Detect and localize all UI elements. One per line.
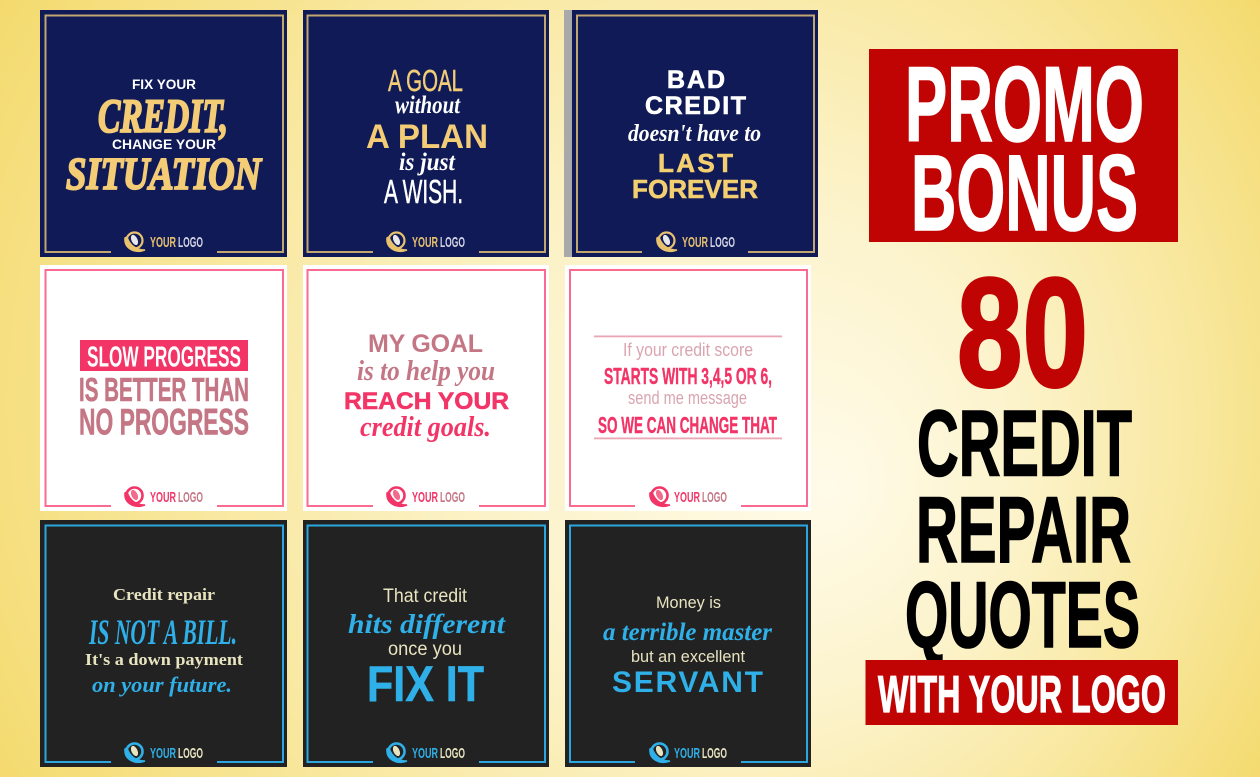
quote text: if your credit score bbox=[594, 336, 782, 439]
quote text: a goal without a plan: A PLAN bbox=[366, 118, 488, 156]
logo: LOGO bbox=[440, 489, 465, 506]
quote text: slow progress: IS BETTER THAN bbox=[79, 371, 249, 408]
logo: YOUR bbox=[412, 234, 438, 251]
logo: YOUR bbox=[150, 745, 176, 762]
panel: a goal without a plan bbox=[303, 10, 549, 257]
logo: LOGO bbox=[178, 234, 203, 251]
quote text: fix it: hits different bbox=[348, 609, 507, 639]
quote text: money is: but an excellent bbox=[631, 647, 745, 666]
panel: if your credit score bbox=[565, 265, 811, 511]
quote text: slow progress: NO PROGRESS bbox=[79, 402, 249, 442]
quote text: a goal without a plan: A WISH. bbox=[384, 173, 463, 210]
logo: LOGO bbox=[710, 234, 735, 251]
quote text: is not a bill: IS NOT A BILL. bbox=[88, 612, 237, 652]
number: 80: 80 bbox=[957, 246, 1088, 419]
logo bbox=[125, 488, 203, 506]
quote text: bad credit bbox=[628, 66, 761, 204]
quote text: if your credit score: STARTS WITH 3,4,5 OR 6, bbox=[604, 363, 772, 389]
logo bbox=[387, 744, 465, 762]
quote text: if your credit score: send me message bbox=[628, 388, 747, 408]
logo: LOGO bbox=[178, 745, 203, 762]
quote text: is not a bill bbox=[85, 585, 243, 697]
logo bbox=[657, 232, 735, 251]
quote text: money is: a terrible master bbox=[603, 619, 772, 646]
quote text: fix your credit: CHANGE YOUR bbox=[112, 137, 216, 152]
quote text: if your credit score: SO WE CAN CHANGE THAT bbox=[598, 412, 777, 438]
quote text: fix your credit bbox=[66, 77, 262, 199]
panel: bad credit doesn't have to last forever bbox=[564, 10, 818, 257]
quote text: bad credit: FOREVER bbox=[632, 174, 758, 204]
quote text: money is bbox=[603, 593, 772, 699]
quote text: my goal bbox=[344, 330, 509, 443]
logo: YOUR bbox=[682, 234, 708, 251]
logo bbox=[387, 488, 465, 506]
logo bbox=[387, 232, 465, 251]
logo: LOGO bbox=[440, 234, 465, 251]
logo: LOGO bbox=[702, 489, 727, 506]
panel: fix your credit bbox=[40, 10, 287, 257]
banner: promo bonus bbox=[869, 44, 1178, 253]
heading: credit repair quotes: CREDIT bbox=[917, 390, 1132, 496]
quote text: bad credit: CREDIT bbox=[645, 92, 746, 120]
quote text: fix your credit: SITUATION bbox=[66, 149, 262, 199]
logo bbox=[125, 744, 203, 762]
panel: money is a terrible master bbox=[565, 520, 811, 767]
quote text: slow progress bbox=[79, 340, 249, 442]
quote text: bad credit: LAST bbox=[658, 148, 733, 178]
quote text: money is: Money is bbox=[656, 593, 721, 612]
quote text: my goal: REACH YOUR bbox=[344, 388, 509, 415]
logo: YOUR bbox=[150, 489, 176, 506]
quote text: a goal without a plan bbox=[366, 63, 488, 210]
quote text: fix your credit: CREDIT, bbox=[98, 90, 228, 143]
quote text: a goal without a plan: is just bbox=[399, 149, 456, 176]
quote text: if your credit score: If your credit score bbox=[623, 340, 753, 360]
quote text: a goal without a plan: A GOAL bbox=[388, 63, 463, 98]
logo: YOUR bbox=[674, 745, 700, 762]
quote text: fix it: FIX IT bbox=[367, 656, 484, 712]
quote text: is not a bill: It's a down payment bbox=[85, 650, 243, 669]
quote text: fix it bbox=[348, 586, 507, 712]
quote text: fix it: once you bbox=[388, 639, 462, 660]
logo bbox=[650, 488, 727, 506]
logo: YOUR bbox=[412, 745, 438, 762]
heading: credit repair quotes: REPAIR bbox=[916, 477, 1131, 582]
logo: YOUR bbox=[150, 234, 176, 251]
quote text: money is: SERVANT bbox=[612, 666, 763, 699]
logo: YOUR bbox=[674, 489, 700, 506]
heading: credit repair quotes bbox=[905, 390, 1140, 667]
logo: YOUR bbox=[412, 489, 438, 506]
quote text: my goal: MY GOAL bbox=[368, 330, 483, 358]
panel: slow progress bbox=[40, 265, 287, 511]
panel: my goal bbox=[303, 265, 549, 511]
quote text: bad credit: doesn't have to bbox=[628, 121, 761, 147]
logo bbox=[125, 232, 203, 251]
quote text: bad credit: BAD bbox=[667, 66, 725, 94]
quote text: is not a bill: on your future. bbox=[92, 672, 232, 697]
quote text: a goal without a plan: without bbox=[395, 92, 461, 119]
logo bbox=[650, 744, 727, 762]
quote text: my goal: is to help you bbox=[357, 356, 495, 387]
quote text: my goal: credit goals. bbox=[360, 412, 491, 443]
logo: LOGO bbox=[702, 745, 727, 762]
logo: LOGO bbox=[440, 745, 465, 762]
quote text: fix your credit: FIX YOUR bbox=[132, 77, 196, 92]
panel: that credit hits different bbox=[303, 520, 549, 767]
quote text: fix it: That credit bbox=[383, 586, 468, 607]
logo: LOGO bbox=[178, 489, 203, 506]
banner: with your logo bbox=[866, 660, 1178, 725]
quote text: is not a bill: Credit repair bbox=[113, 585, 215, 604]
quote text: slow progress: SLOW PROGRESS bbox=[87, 342, 241, 374]
panel: credit repair is not a bill bbox=[40, 520, 287, 767]
